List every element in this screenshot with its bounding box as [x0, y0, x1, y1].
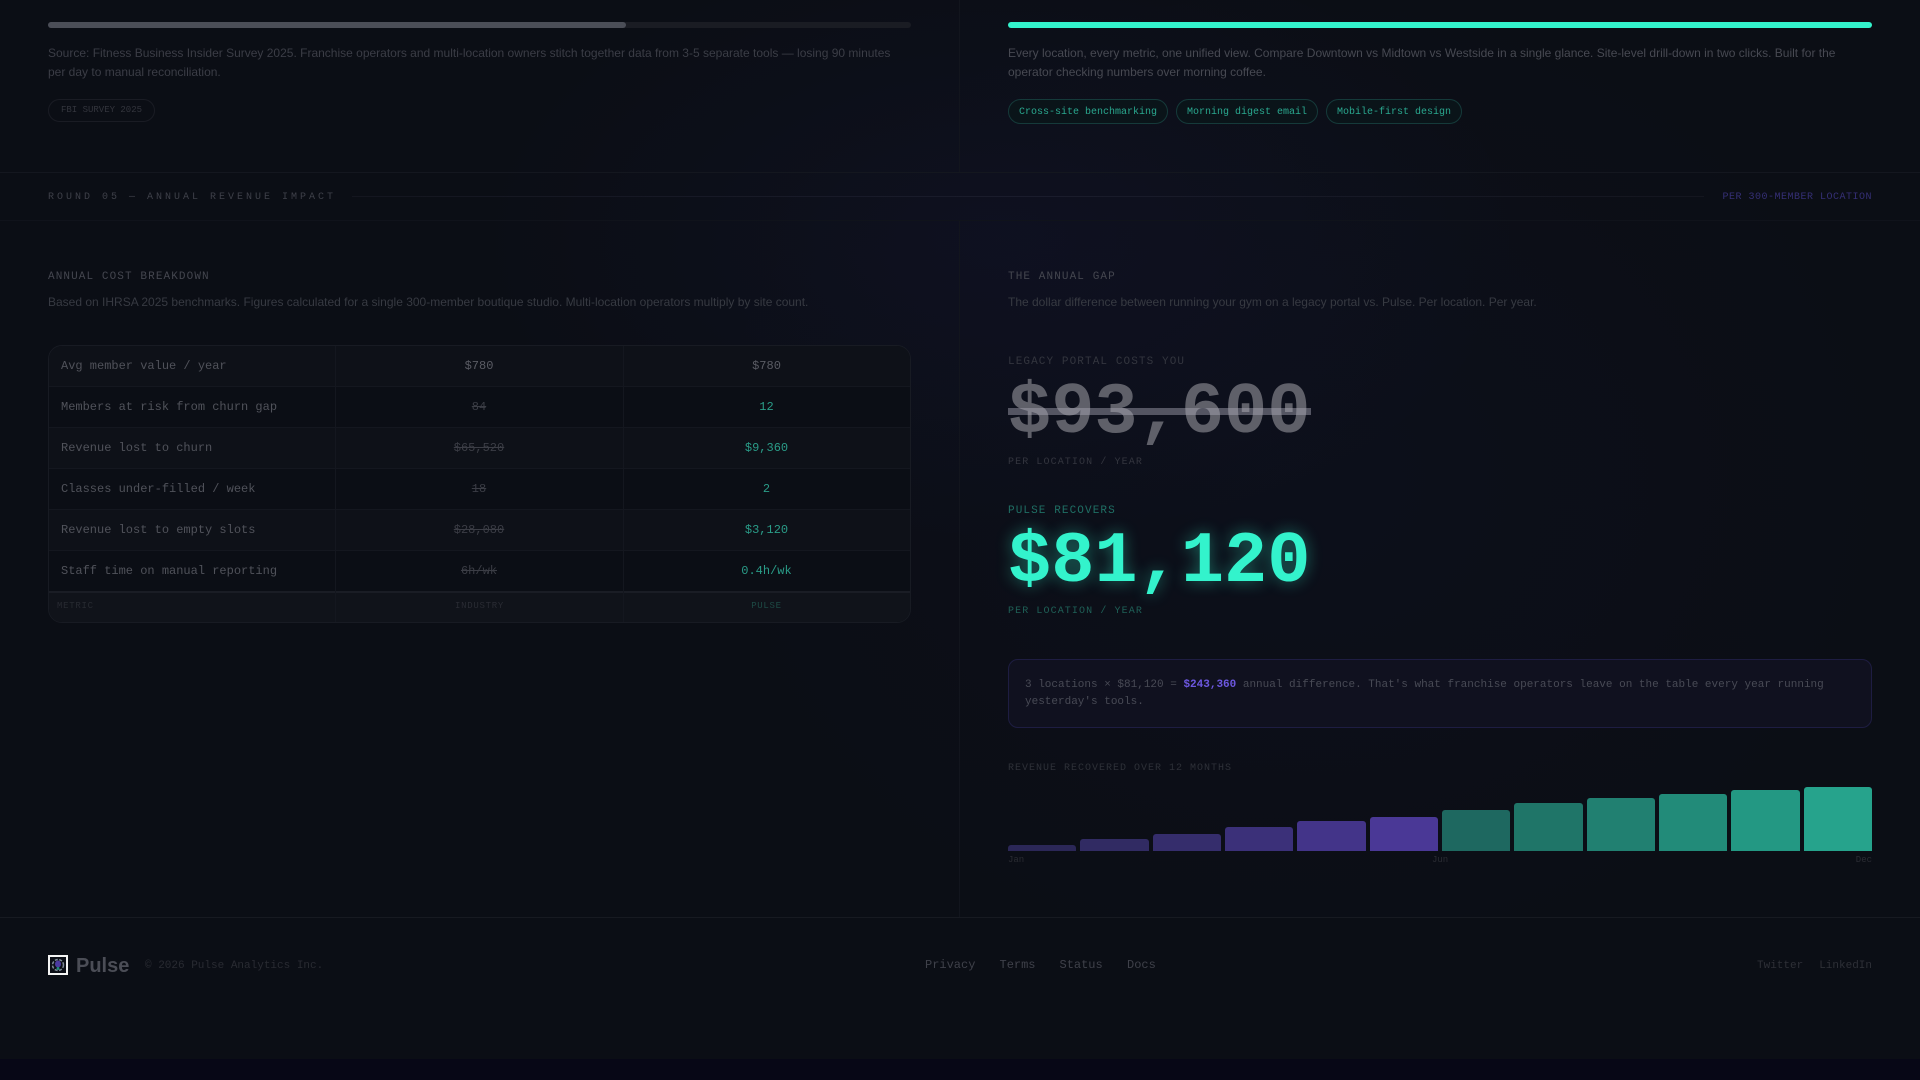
row: column headers: [57, 601, 782, 611]
copyright: © 2026 Pulse Analytics Inc.: [145, 960, 323, 972]
panel: top right unified view card: [1008, 22, 1872, 79]
unit: PER LOCATION / YEAR: [1008, 606, 1143, 617]
tag: digest: Morning digest email: [1187, 107, 1307, 118]
unit: PER LOCATION / YEAR: [1008, 457, 1143, 468]
description: Based on IHRSA 2025 benchmarks. Figures calculated for a single 300-member boutique studio. Multi-location operators multiply by site count.: [48, 295, 808, 309]
tag: mobile: Mobile-first design: [1337, 107, 1451, 118]
footer links: Privacy: [925, 958, 975, 972]
tag: mobile: [1326, 99, 1462, 124]
panel: annual cost breakdown: [48, 271, 808, 309]
callout: multi-location total: yesterday's tools.: [1025, 696, 1144, 708]
panel: annual gap heading: [1008, 271, 1537, 309]
progress bar: legacy: [48, 22, 911, 28]
social links: Twitter: [1757, 960, 1803, 972]
row: avg member value: Avg member value / year: [61, 359, 227, 373]
row: staff time: Staff time on manual reporting: [61, 564, 277, 578]
chart axis labels: Dec: [1856, 855, 1872, 865]
footer links: [925, 958, 1156, 972]
tag: benchmarking: [1008, 99, 1168, 124]
social links: LinkedIn: [1819, 960, 1872, 972]
bar chart: revenue recovered: [1008, 787, 1872, 851]
row: staff time: [61, 564, 792, 578]
brand name: Pulse: [76, 955, 129, 977]
row: column headers: METRIC: [57, 601, 94, 611]
chart axis labels: Jun: [1432, 855, 1448, 865]
icon: logo: [48, 955, 68, 975]
row: avg member value: $780: [752, 359, 781, 373]
tag: FBI survey: [48, 99, 155, 122]
row: staff time: 6h/wk: [461, 564, 497, 578]
footer links: Docs: [1127, 958, 1156, 972]
row: empty slots: Revenue lost to empty slots: [61, 523, 255, 537]
progress bar: pulse: [1008, 22, 1872, 28]
strike line: [1008, 408, 1311, 415]
section rule: [352, 196, 1704, 197]
row shading: [49, 346, 912, 387]
source text: [48, 46, 890, 79]
description text: operator checking numbers over morning coffee.: [1008, 65, 1266, 79]
social links: [1757, 960, 1872, 972]
chart heading: REVENUE RECOVERED OVER 12 MONTHS: [1008, 763, 1232, 774]
description text: Every location, every metric, one unified view. Compare Downtown vs Midtown vs Westside in a single glance. Site-level drill-down in two clicks. Built for the: [1008, 46, 1835, 60]
source text: Source: Fitness Business Insider Survey 2025. Franchise operators and multi-location owners stitch together data from 3-5 separate tools — losing 90 minutes: [48, 46, 890, 60]
row: revenue lost churn: [61, 441, 788, 455]
panel: legacy cost figure: [1008, 356, 1311, 468]
callout: multi-location total: 3 locations × $81,120 = $243,360 annual difference. That's what franchise operators leave on the table every year running: [1025, 679, 1824, 691]
row: classes under-filled: 18: [472, 482, 486, 496]
column divider: [959, 0, 960, 172]
row: members at risk: [61, 400, 774, 414]
row: classes under-filled: 2: [763, 482, 770, 496]
section note: PER 300-MEMBER LOCATION: [1722, 192, 1872, 203]
row: revenue lost churn: $65,520: [454, 441, 504, 455]
row: empty slots: $3,120: [745, 523, 788, 537]
row: members at risk: Members at risk from churn gap: [61, 400, 277, 414]
section divider: round 05: [0, 172, 1920, 221]
heading: THE ANNUAL GAP: [1008, 271, 1116, 283]
panel: top left survey card: [48, 22, 911, 122]
heading: ANNUAL COST BREAKDOWN: [48, 271, 210, 283]
bottom strip: [0, 1059, 1920, 1080]
row: column headers: INDUSTRY: [455, 601, 504, 611]
footer links: Terms: [1000, 958, 1036, 972]
chart axis labels: [1008, 855, 1872, 865]
footer: [0, 917, 1920, 1059]
header row: [49, 591, 912, 624]
row: members at risk: 84: [472, 400, 486, 414]
row: revenue lost churn: Revenue lost to churn: [61, 441, 212, 455]
tag: benchmarking: Cross-site benchmarking: [1019, 107, 1157, 118]
section title: ROUND 05 — ANNUAL REVENUE IMPACT: [48, 192, 336, 203]
row: avg member value: $780: [465, 359, 493, 373]
big number: $81,120: [1008, 521, 1310, 603]
tag: digest: [1176, 99, 1318, 124]
row: column headers: PULSE: [751, 601, 782, 611]
row: empty slots: [61, 523, 788, 537]
source text: per day to manual reconciliation.: [48, 65, 221, 79]
tag: FBI survey: FBI SURVEY 2025: [61, 105, 142, 115]
label: PULSE RECOVERS: [1008, 505, 1116, 517]
label: LEGACY PORTAL COSTS YOU: [1008, 356, 1185, 368]
row: staff time: 0.4h/wk: [741, 564, 792, 578]
callout: multi-location total: [1008, 659, 1872, 728]
row: avg member value: [61, 359, 781, 373]
description text: [1008, 46, 1835, 79]
row: members at risk: 12: [759, 400, 774, 414]
row: classes under-filled: Classes under-filled / week: [61, 482, 255, 496]
big number: $93,600: [1008, 372, 1310, 454]
footer links: Status: [1060, 958, 1103, 972]
description: The dollar difference between running your gym on a legacy portal vs. Pulse. Per location. Per year.: [1008, 295, 1537, 309]
row: empty slots: $28,080: [454, 523, 504, 537]
row: classes under-filled: [61, 482, 770, 496]
chart axis labels: Jan: [1008, 855, 1024, 865]
table: cost comparison: [48, 345, 911, 623]
row: revenue lost churn: $9,360: [745, 441, 788, 455]
panel: pulse recovers figure: [1004, 505, 1316, 617]
